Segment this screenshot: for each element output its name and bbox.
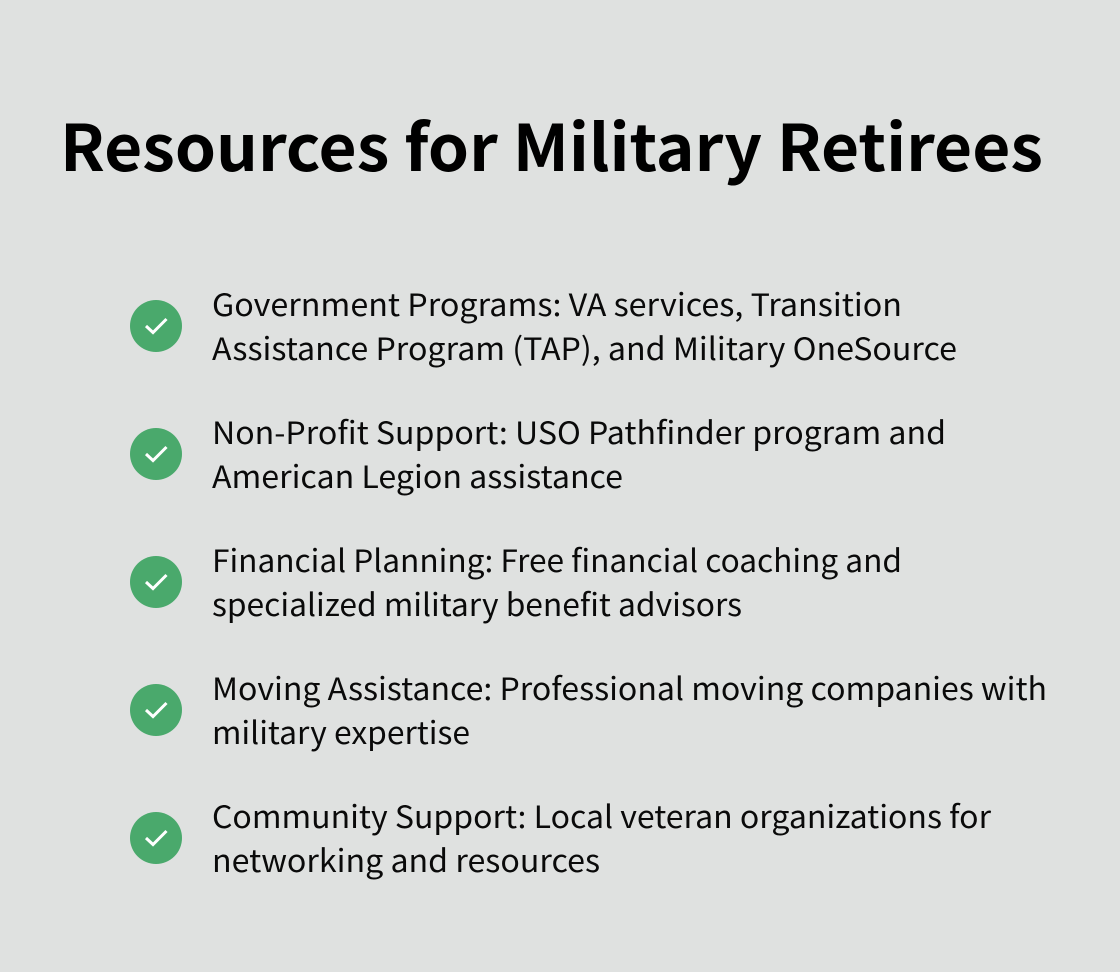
icon: check circle xyxy=(130,300,182,352)
text: financial planning: Financial Planning: Free financial coaching and xyxy=(212,536,902,581)
text: government programs xyxy=(212,280,957,369)
list item: government programs xyxy=(130,280,957,369)
text: community support: networking and resources xyxy=(212,836,600,881)
text: moving assistance: military expertise xyxy=(212,708,470,753)
list item: financial planning xyxy=(130,536,902,625)
icon: check circle xyxy=(130,812,182,864)
text: moving assistance: Moving Assistance: Professional moving companies with xyxy=(212,664,1047,709)
text: financial planning: specialized military benefit advisors xyxy=(212,580,742,625)
title: Resources for Military Retirees xyxy=(60,98,1043,190)
list item: community support xyxy=(130,792,992,881)
text: government programs: Assistance Program (TAP), and Military OneSource xyxy=(212,324,957,369)
text: community support xyxy=(212,792,992,881)
text: non-profit support xyxy=(212,408,946,497)
icon: check circle xyxy=(130,556,182,608)
list item: non-profit support xyxy=(130,408,946,497)
text: government programs: Government Programs: VA services, Transition xyxy=(212,280,902,325)
icon: check circle xyxy=(130,684,182,736)
list item: moving assistance xyxy=(130,664,1047,753)
text: non-profit support: American Legion assistance xyxy=(212,452,623,497)
text: financial planning xyxy=(212,536,902,625)
icon: check circle xyxy=(130,428,182,480)
text: community support: Community Support: Local veteran organizations for xyxy=(212,792,992,837)
text: non-profit support: Non-Profit Support: USO Pathfinder program and xyxy=(212,408,946,453)
text: moving assistance xyxy=(212,664,1047,753)
